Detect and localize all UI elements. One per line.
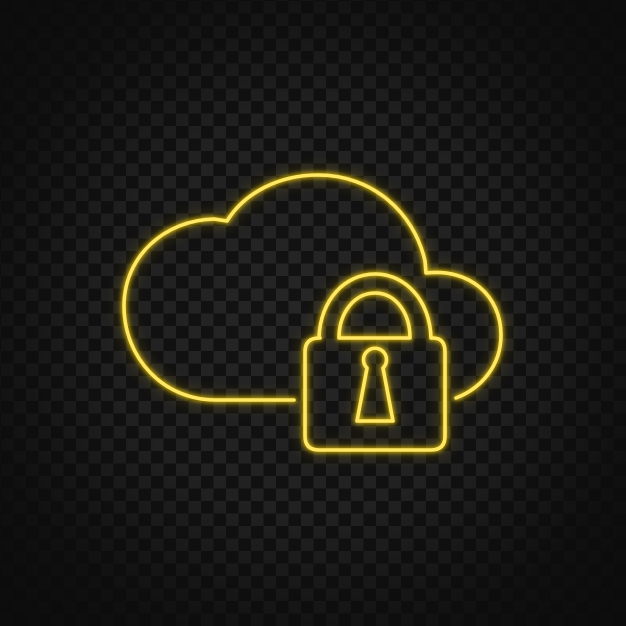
icon: neon cloud with padlock [124, 175, 501, 450]
